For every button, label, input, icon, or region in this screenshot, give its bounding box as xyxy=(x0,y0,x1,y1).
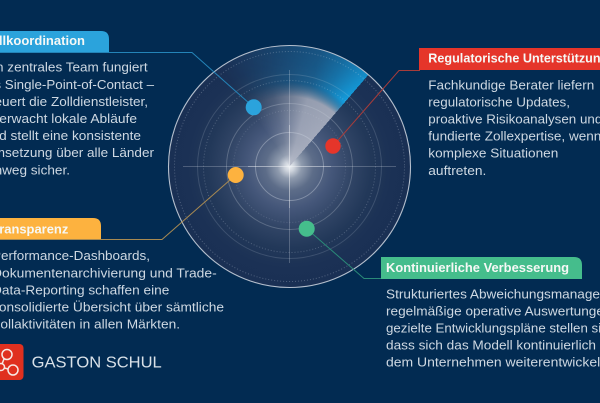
marker: blue dot xyxy=(246,99,262,115)
heading tab: Transparenz xyxy=(0,218,101,239)
text block: Zollkoordination xyxy=(0,60,155,177)
text block: Kontinuierliche Verbesserung xyxy=(386,286,600,370)
radar disc xyxy=(168,45,411,288)
icon: logo mark xyxy=(0,344,24,380)
panel: Zollkoordination xyxy=(0,31,254,177)
marker: orange dot xyxy=(228,167,244,183)
text block: Regulatorische Unterstützung: fundierte Zollexpertise, wenn xyxy=(428,129,600,144)
connector line: orange xyxy=(0,175,236,240)
text block: Regulatorische Unterstützung xyxy=(428,77,600,178)
connector line: red xyxy=(333,70,420,146)
text block: Kontinuierliche Verbesserung: dass sich das Modell kontinuierlich mit xyxy=(386,338,600,353)
text block: Kontinuierliche Verbesserung: dem Unternehmen weiterentwickelt. xyxy=(386,355,600,370)
marker: red dot xyxy=(325,138,341,154)
text block: Regulatorische Unterstützung: auftreten. xyxy=(428,163,486,178)
marker: green dot xyxy=(299,221,315,237)
connector line: green xyxy=(307,229,382,278)
heading tab: Zollkoordination xyxy=(0,31,109,52)
outer radar ring xyxy=(168,46,410,288)
logo: Gaston Schul xyxy=(0,344,162,380)
radar rings and crosshair xyxy=(174,51,405,282)
heading tab: Regulatorische Unterstützung xyxy=(419,48,600,70)
text block: Transparenz xyxy=(0,248,224,332)
text block: Regulatorische Unterstützung: Fachkundige Berater liefern xyxy=(428,77,594,92)
text block: Regulatorische Unterstützung: komplexe Situationen xyxy=(428,146,558,161)
text block: Regulatorische Unterstützung: regulatorische Updates, xyxy=(428,94,570,109)
panel: Regulatorische Unterstützung xyxy=(333,48,600,178)
heading tab: Kontinuierliche Verbesserung: Kontinuierliche Verbesserung xyxy=(386,260,569,275)
connector line: blue xyxy=(0,52,254,107)
panel: Kontinuierliche Verbesserung xyxy=(307,229,600,370)
panel: Transparenz xyxy=(0,175,236,332)
wordmark: GASTON SCHUL xyxy=(32,355,162,372)
radar sweep: grey inner sector xyxy=(257,84,342,166)
radar sweep: blue outer band xyxy=(236,46,368,112)
heading tab: Kontinuierliche Verbesserung xyxy=(381,257,582,279)
text block: Regulatorische Unterstützung: proaktive Risikoanalysen und xyxy=(428,112,600,126)
